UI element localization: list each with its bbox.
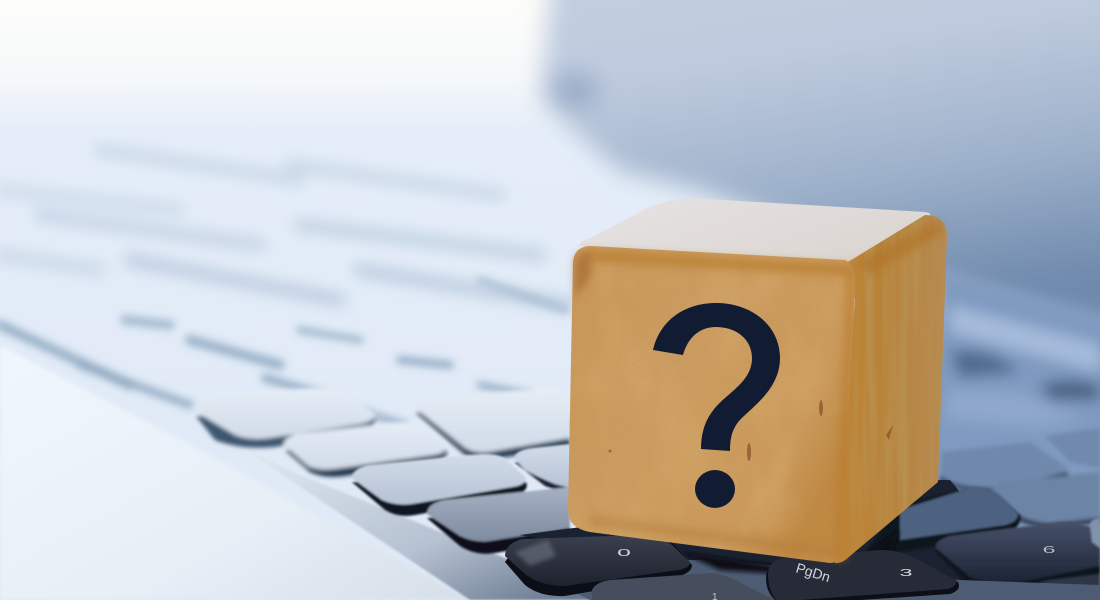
cube: worn edges xyxy=(574,220,944,560)
shadow under cube xyxy=(680,530,900,580)
deck under front keys xyxy=(510,560,1100,600)
cube: front face xyxy=(568,246,855,563)
far right keys xyxy=(940,428,1100,526)
cube: wood marks xyxy=(608,400,893,461)
right keyboard area xyxy=(900,270,1100,600)
cube: right face streaks xyxy=(840,216,947,562)
blurred laptop screen xyxy=(540,0,1100,340)
cube: top face xyxy=(579,198,930,262)
key: PgDn 3: 3 xyxy=(899,567,913,578)
near-middle keys xyxy=(352,444,570,554)
palm rest strip xyxy=(230,440,600,600)
wooden cube xyxy=(565,198,950,570)
dark gap behind cube xyxy=(520,480,1000,585)
blurred key streaks left xyxy=(0,150,570,305)
key: PgDn 3: PgDn xyxy=(794,560,832,585)
key: 0 xyxy=(505,535,692,596)
near right keys xyxy=(860,487,1100,600)
key: PgDn 3 xyxy=(766,550,959,600)
key: 0: 0 xyxy=(617,547,631,559)
palm rest xyxy=(0,345,470,600)
cube: right face xyxy=(835,215,947,563)
question mark xyxy=(653,303,780,508)
key: lower middle xyxy=(592,573,775,600)
cube: front texture xyxy=(565,245,860,565)
key label: 6: 6 xyxy=(1042,544,1056,555)
near-left light keys xyxy=(195,387,570,477)
